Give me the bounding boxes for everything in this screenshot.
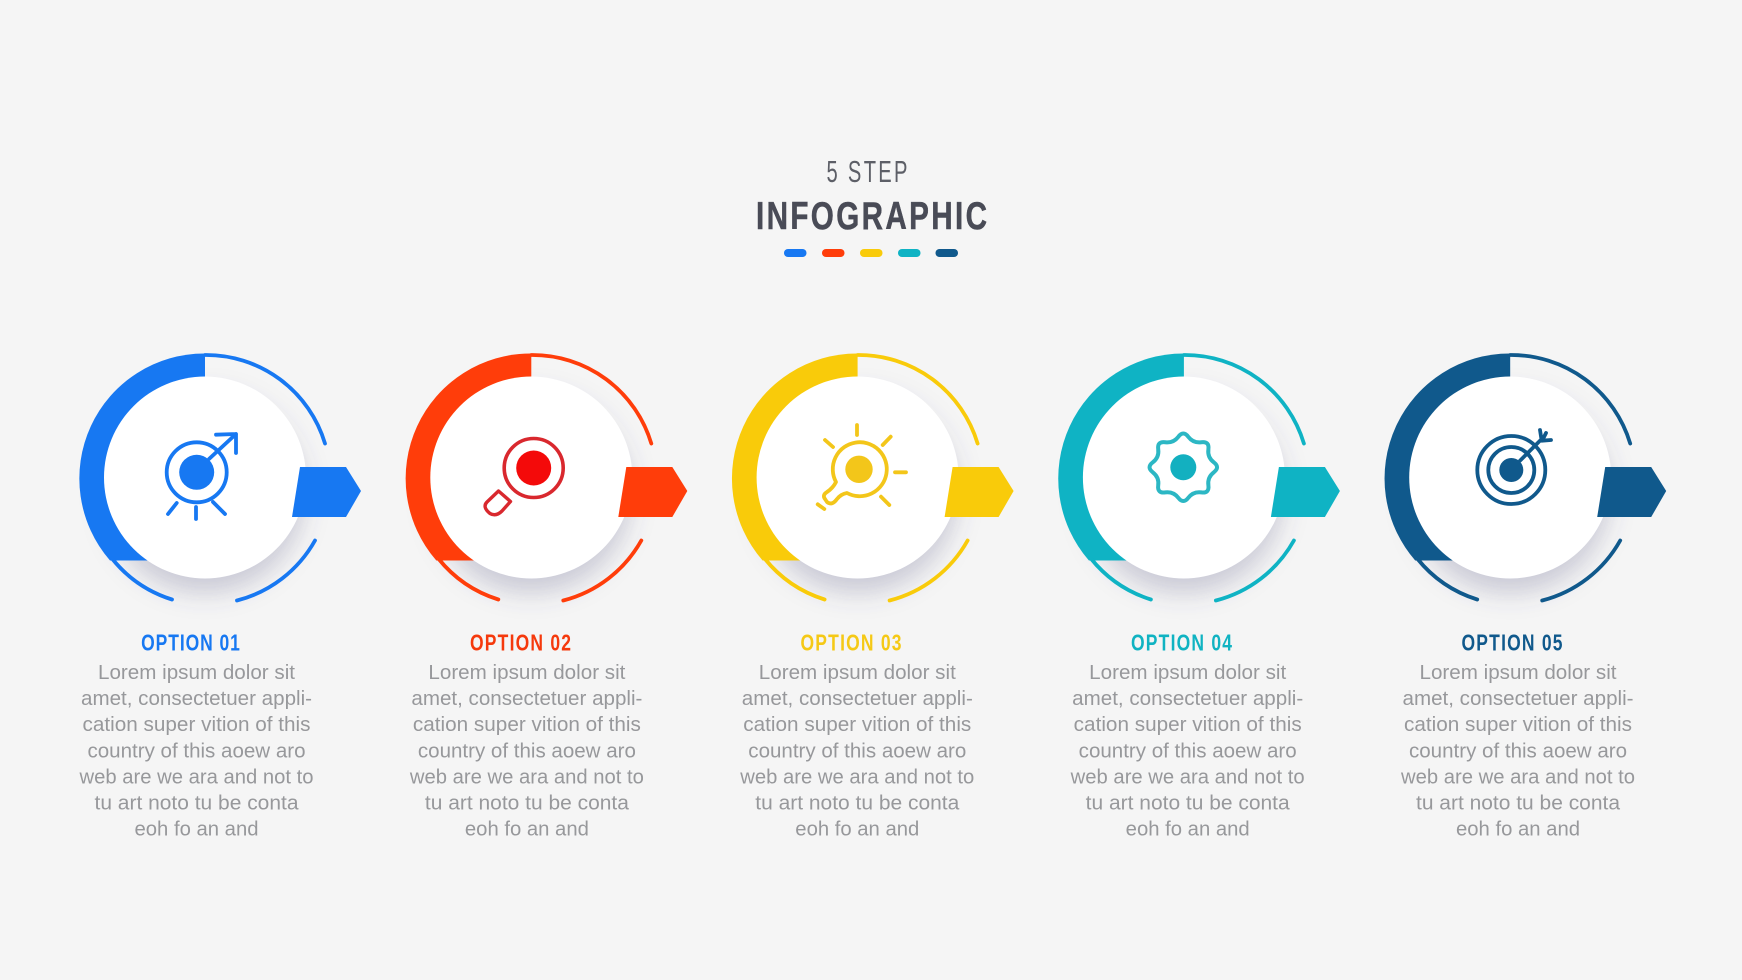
- body text: amet, consectetuer appli-: [742, 688, 973, 710]
- body text: amet, consectetuer appli-: [1072, 688, 1303, 710]
- panel: option 04: [1058, 353, 1340, 840]
- icon: male symbol target: [167, 434, 236, 519]
- label: option 02: OPTION 02: [470, 631, 571, 656]
- body text: cation super vition of this: [1074, 714, 1302, 736]
- ring: red segmented circle: [406, 353, 651, 600]
- title block: [756, 154, 987, 257]
- body text: cation super vition of this: [743, 714, 971, 736]
- body text: tu art noto tu be conta: [94, 792, 299, 814]
- body text: country of this aoew aro: [1409, 740, 1627, 762]
- panel: option 03: [732, 353, 1014, 840]
- ring: navy segmented circle: [1385, 353, 1630, 600]
- panel: option 01: [78, 353, 361, 840]
- icon: light bulb: [818, 425, 906, 509]
- label: option 05: OPTION 05: [1461, 631, 1563, 656]
- body text: tu art noto tu be conta: [1416, 792, 1621, 814]
- body text: cation super vition of this: [413, 714, 641, 736]
- white disc: [1409, 376, 1611, 578]
- panel: option 05: [1385, 353, 1666, 840]
- body text: Lorem ipsum dolor sit: [1089, 662, 1287, 684]
- body text: [78, 662, 314, 840]
- colour key dashes: [784, 249, 958, 257]
- body text: country of this aoew aro: [418, 740, 636, 762]
- body text: eoh fo an and: [134, 818, 258, 840]
- white disc: [430, 376, 632, 578]
- body text: amet, consectetuer appli-: [1402, 688, 1634, 710]
- body text: amet, consectetuer appli-: [81, 688, 312, 710]
- arrow tag: [618, 467, 687, 517]
- label: option 04: OPTION 04: [1131, 631, 1233, 656]
- body text: eoh fo an and: [465, 818, 589, 840]
- arrow tag: [1597, 467, 1666, 517]
- heading: 5 step: 5 STEP: [827, 154, 907, 189]
- white disc: [104, 376, 306, 578]
- body text: web are we ara and not to: [1070, 766, 1305, 788]
- body text: tu art noto tu be conta: [755, 792, 960, 814]
- white disc: [1083, 376, 1285, 578]
- icon: magnifier: [485, 438, 563, 515]
- icon: gear: [1150, 434, 1217, 501]
- body text: [409, 662, 644, 840]
- body text: tu art noto tu be conta: [425, 792, 630, 814]
- ring: yellow segmented circle: [732, 353, 978, 600]
- body text: tu art noto tu be conta: [1086, 792, 1291, 814]
- body text: [739, 662, 974, 840]
- body text: eoh fo an and: [1456, 818, 1580, 840]
- body text: eoh fo an and: [1126, 818, 1250, 840]
- body text: country of this aoew aro: [88, 740, 306, 762]
- body text: Lorem ipsum dolor sit: [428, 662, 626, 684]
- arrow tag: [292, 467, 361, 517]
- body text: web are we ara and not to: [1400, 766, 1635, 788]
- body text: Lorem ipsum dolor sit: [1420, 662, 1617, 684]
- body text: cation super vition of this: [82, 714, 310, 736]
- body text: amet, consectetuer appli-: [411, 688, 642, 710]
- heading: infographic: INFOGRAPHIC: [756, 195, 987, 238]
- body text: country of this aoew aro: [748, 740, 966, 762]
- body text: cation super vition of this: [1404, 714, 1632, 736]
- label: option 03: OPTION 03: [800, 631, 902, 656]
- body text: country of this aoew aro: [1079, 740, 1297, 762]
- ring: blue segmented circle: [79, 353, 325, 600]
- body text: Lorem ipsum dolor sit: [759, 662, 956, 684]
- body text: Lorem ipsum dolor sit: [98, 662, 295, 684]
- body text: [1070, 662, 1305, 840]
- panel: option 02: [406, 353, 687, 840]
- icon: target with arrow: [1477, 430, 1551, 504]
- arrow tag: [945, 467, 1014, 517]
- body text: web are we ara and not to: [78, 766, 314, 788]
- body text: eoh fo an and: [795, 818, 919, 840]
- ring: teal segmented circle: [1058, 353, 1304, 600]
- label: option 01: OPTION 01: [141, 631, 240, 656]
- body text: web are we ara and not to: [409, 766, 644, 788]
- arrow tag: [1271, 467, 1340, 517]
- body text: [1400, 662, 1635, 840]
- white disc: [757, 376, 959, 578]
- body text: web are we ara and not to: [739, 766, 974, 788]
